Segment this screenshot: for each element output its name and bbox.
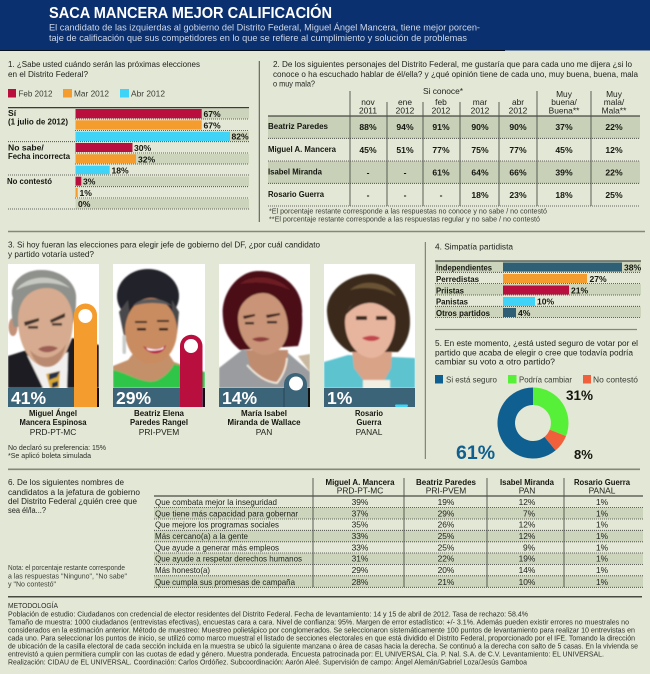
bar chart: election date knowledge: Fecha incorrecta [8, 151, 70, 161]
donut chart [456, 387, 593, 464]
bar chart: election date knowledge: 1% [80, 188, 92, 198]
table: candidate attributes: Que cumpla sus promesas de campaña [155, 577, 295, 587]
table: candidate attributes: 7% [523, 508, 536, 518]
table: name recognition and opinion: 25% [605, 190, 623, 200]
table: candidate attributes: 29% [352, 565, 369, 575]
table: candidate attributes: 1% [596, 531, 609, 541]
table: name recognition and opinion: mar [473, 97, 487, 107]
subtitle: taje de calificación que sus competidores en lo que se refiere al cumplimiento y solución de problemas [49, 33, 467, 43]
bar chart: party sympathy: Independientes [436, 262, 492, 272]
question 6 heading: candidatos a la jefatura de gobierno [8, 487, 140, 497]
bar chart: party sympathy: 38% [624, 262, 642, 272]
panel: methodology: entrevistó a quien permitiera cumplir con las cuotas de edad y género. Muestra ponderada. Encuesta patrocinada por: EL UNIVERSAL Cía. P. Nal. S.A. de C.V. Levantamiento: EL UNIVERSAL. [8, 650, 604, 658]
candidate names: Rosario [355, 408, 383, 418]
table: name recognition and opinion: 77% [509, 145, 527, 155]
note: undeclared preference [8, 443, 106, 460]
table: candidate attributes: PRD-PT-MC [337, 486, 383, 496]
table: candidate attributes: Que ayude a generar más empleos [155, 542, 279, 552]
table: candidate attributes: 1% [596, 565, 609, 575]
table: name recognition and opinion: - [404, 168, 407, 178]
table: candidate attributes: 39% [352, 497, 369, 507]
candidate names: Miranda de Wallace [228, 417, 301, 427]
panel: methodology [8, 601, 638, 666]
table: name recognition and opinion: 2012 [396, 106, 415, 116]
bar chart: election date knowledge: 30% [134, 143, 152, 153]
bar chart: party sympathy: Panistas [436, 296, 468, 306]
table: name recognition and opinion: 39% [555, 168, 573, 178]
question 6 heading: del Distrito Federal ¿quién cree que [8, 496, 137, 506]
donut chart: 31% [566, 388, 593, 403]
table: candidate attributes: 19% [519, 554, 536, 564]
bar chart: election date knowledge: Sí [8, 108, 17, 118]
table: candidate attributes: Más cercano(a) a la gente [155, 531, 248, 541]
table: name recognition and opinion: 77% [432, 145, 450, 155]
bar chart: party sympathy: Perredistas [436, 274, 479, 284]
table: candidate attributes: PAN [519, 486, 535, 496]
bar chart: election date knowledge: 0% [78, 199, 91, 209]
candidate card: Mancera [8, 264, 99, 408]
legend: vote certainty: Podría cambiar [519, 374, 572, 384]
question 6 heading [8, 477, 140, 515]
question 5 heading [435, 338, 638, 366]
candidate card: Miranda: 14% [222, 388, 257, 408]
bar chart: party sympathy: 4% [518, 308, 531, 318]
bar chart: election date knowledge: 32% [138, 154, 156, 164]
table: name recognition and opinion: 2012 [471, 106, 490, 116]
candidate card: Paredes [113, 264, 205, 408]
panel: methodology: Tamaño de muestra: 1000 ciudadanos (entrevistas efectivas), encuestas cara a cara. Nivel de confianza: 95%. Margen de error estadístico: +/- 3.1%. Además pueden existir errores no muestrales no [8, 618, 629, 626]
donut chart: 8% [574, 447, 593, 462]
table: name recognition and opinion: - [440, 190, 443, 200]
table: candidate attributes: PANAL [589, 486, 616, 496]
table: name recognition and opinion: 45% [359, 145, 377, 155]
candidate card: Guerra: 1% [327, 388, 353, 408]
question 3 heading: y partido votaría usted? [8, 249, 94, 259]
table: name recognition and opinion: 45% [555, 145, 573, 155]
legend: months: Mar 2012 [74, 88, 109, 98]
candidate card: Paredes: 29% [116, 388, 151, 408]
candidate names: PANAL [356, 427, 383, 437]
table: candidate attributes: 12% [519, 520, 536, 530]
footnotes [269, 208, 547, 224]
table: candidate attributes: 25% [438, 542, 455, 552]
table: name recognition and opinion: abr [512, 97, 524, 107]
table: candidate attributes: 21% [438, 577, 455, 587]
table: candidate attributes: 12% [519, 497, 536, 507]
bar chart: election date knowledge [7, 108, 249, 209]
table: name recognition and opinion: 2012 [509, 106, 528, 116]
bar chart: party sympathy [435, 261, 642, 318]
table: name recognition and opinion: Buena** [549, 106, 580, 116]
footnotes: **El porcentaje restante corresponde a las respuestas regular y no sabe / no contestó [269, 216, 540, 224]
panel: methodology: considerados en la estimación anterior. Método de muestreo: Muestreo polietápico por conglomerados. Se seleccionaron sistemáticamente 100 puntos de levantamiento para realizar 10 entrevistas en [8, 626, 635, 634]
table: candidate attributes: 20% [438, 565, 455, 575]
gauge: red [180, 335, 202, 407]
table: name recognition and opinion: 22% [605, 122, 623, 132]
table: candidate attributes: 14% [519, 565, 536, 575]
table: name recognition and opinion: 64% [471, 168, 489, 178]
panel: methodology: Población de estudio: Ciudadanos con credencial de elector residentes del Distrito Federal. Fecha de levantamiento: 14 y 15 de abril de 2012. Tasa de rechazo: 58.4% [8, 610, 528, 618]
table: name recognition and opinion: mala/ [604, 97, 625, 107]
table: candidate attributes: 25% [438, 531, 455, 541]
table: name recognition and opinion: 18% [471, 190, 489, 200]
percent band [324, 388, 415, 407]
table: candidate attributes: 31% [352, 554, 369, 564]
table: candidate attributes: Que tiene más capacidad para gobernar [155, 508, 298, 518]
table: candidate attributes: 33% [352, 542, 369, 552]
table: candidate attributes: 28% [352, 577, 369, 587]
bar chart: election date knowledge: No contestó [7, 176, 52, 186]
percent band [219, 388, 310, 407]
candidate names: PRD-PT-MC [30, 427, 76, 437]
legend: vote certainty: Si está seguro [446, 374, 497, 384]
table: candidate attributes: 22% [438, 554, 455, 564]
question 3 heading [8, 240, 320, 259]
table: name recognition and opinion: Miguel A. Mancera [268, 144, 336, 154]
question 4 heading: 4. Simpatía partidista [435, 242, 513, 252]
table: candidate attributes: PRI-PVEM [426, 486, 466, 496]
header banner [0, 0, 650, 51]
bar chart: election date knowledge: No sabe/ [8, 142, 44, 152]
panel: methodology: Realización: CIDAU de EL UNIVERSAL. Coordinación: Carlos Ordóñez. Subcoordinación: Aarón Aleé. Supervisión de campo: Ángel Alemán/Gabriel Loza/Jesús Gamboa [8, 658, 528, 666]
bar chart: party sympathy: Otros partidos [436, 308, 490, 318]
table: candidate attributes: 35% [352, 520, 369, 530]
table: name recognition and opinion: 91% [432, 122, 450, 132]
table: name recognition and opinion: Si conoce* [423, 86, 464, 96]
bar chart: election date knowledge: 18% [112, 166, 129, 176]
table: name recognition and opinion: feb [435, 97, 447, 107]
candidate names: Miguel Ángel [29, 408, 77, 418]
panel: question 1 [7, 59, 249, 209]
panel: question 6 [8, 477, 643, 588]
table: candidate attributes: 12% [519, 531, 536, 541]
table: name recognition and opinion: Beatriz Paredes [268, 121, 328, 131]
panel: question 4 [435, 242, 642, 318]
legend: vote certainty: No contestó [593, 374, 638, 384]
bar chart: party sympathy: 10% [537, 296, 555, 306]
note: undeclared preference: No declaró su preferencia: 15% [8, 443, 106, 452]
table: candidate attributes: Que ayude a respetar derechos humanos [155, 554, 302, 564]
legend: months: Feb 2012 [18, 88, 53, 98]
candidate names: Guerra [356, 417, 382, 427]
table: candidate attributes: 1% [596, 508, 609, 518]
table: name recognition and opinion: nov [361, 97, 376, 107]
candidate card: Miranda [219, 264, 310, 408]
note: remaining percentage: a las respuestas "Ninguno", "No sabe" [8, 574, 128, 580]
question 3 heading: 3. Si hoy fueran las elecciones para elegir jefe de gobierno del DF, ¿por cuál candidato [8, 240, 320, 250]
table: name recognition and opinion: 12% [605, 145, 623, 155]
question 6 heading: 6. De los siguientes nombres de [8, 477, 124, 487]
table: candidate attributes: 1% [596, 542, 609, 552]
table: candidate attributes: 29% [438, 508, 455, 518]
table: candidate attributes: 19% [438, 497, 455, 507]
footnotes: *El porcentaje restante corresponde a las respuestas no conoce y no sabe / no contestó [269, 208, 547, 216]
table: candidate attributes: 9% [523, 542, 536, 552]
panel: question 5 [435, 338, 638, 464]
note: undeclared preference: *Se aplicó boleta simulada [8, 451, 92, 460]
table: name recognition and opinion: 88% [359, 122, 377, 132]
question 1 heading [8, 59, 200, 79]
question 2 heading: 2. De los siguientes personajes del Distrito Federal, me gustaría que para cada uno me dijera ¿si lo [273, 59, 632, 69]
question 6 heading: sea él/la...? [8, 505, 46, 515]
table: name recognition and opinion: 18% [555, 190, 573, 200]
bar chart: party sympathy: 27% [590, 274, 607, 284]
note: remaining percentage: y "No contestó" [8, 582, 57, 588]
table: candidate attributes: 33% [352, 531, 369, 541]
question 5 heading: cambiar su voto a otro partido? [435, 356, 555, 366]
table: name recognition and opinion: Muy [606, 89, 623, 99]
legend: months [8, 88, 165, 98]
bar chart: party sympathy: 21% [571, 286, 589, 296]
subtitle [49, 22, 480, 43]
table: name recognition and opinion: 90% [471, 122, 489, 132]
table: name recognition and opinion: 90% [509, 122, 527, 132]
table: candidate attributes: Que mejore los programas sociales [155, 520, 279, 530]
donut chart: 61% [456, 442, 495, 464]
table: name recognition and opinion: 66% [509, 168, 527, 178]
question 5 heading: partido que acaba de elegir o cree que todavía podría [435, 348, 633, 358]
table: name recognition and opinion [268, 86, 640, 206]
legend: vote certainty [435, 374, 638, 384]
table: name recognition and opinion: 2011 [359, 106, 377, 116]
table: candidate attributes: 37% [352, 508, 369, 518]
table: candidate attributes: 1% [596, 520, 609, 530]
note: remaining percentage: Nota: el porcentaje restante corresponde [8, 565, 125, 572]
candidate names: Paredes Rangel [130, 417, 188, 427]
candidate card: Mancera: 41% [11, 388, 46, 408]
table: candidate attributes [154, 477, 643, 587]
table: name recognition and opinion: 23% [509, 190, 527, 200]
question 2 heading [273, 59, 638, 88]
table: name recognition and opinion: 2012 [432, 106, 451, 116]
table: name recognition and opinion: 61% [432, 168, 450, 178]
legend: months: Abr 2012 [131, 88, 165, 98]
gauge: orange [74, 304, 97, 407]
table: candidate attributes: Que combata mejor la inseguridad [155, 497, 277, 507]
question 2 heading: conoce o ha escuchado hablar de él/ella? y ¿qué opinión tiene de cada uno, muy buena, buena, mala [273, 69, 638, 79]
question 2 heading: o muy mala? [273, 78, 315, 88]
table: name recognition and opinion: Rosario Guerra [268, 189, 324, 199]
table: name recognition and opinion: - [367, 168, 370, 178]
question 1 heading: en el Distrito Federal? [8, 69, 88, 79]
table: name recognition and opinion: - [404, 190, 407, 200]
bar chart: election date knowledge: 3% [83, 176, 96, 186]
subtitle: El candidato de las izquierdas al gobierno del Distrito Federal, Miguel Ángel Mancera, tiene mejor porcen- [49, 22, 480, 32]
bar chart: election date knowledge: 67% [204, 120, 221, 130]
candidate names [20, 408, 383, 437]
table: candidate attributes: Isabel Miranda [500, 477, 554, 487]
photo: Beatriz Paredes [113, 269, 205, 388]
table: candidate attributes: Beatriz Paredes [416, 477, 476, 487]
candidate names: Beatriz Elena [134, 408, 184, 418]
candidate card: Guerra [324, 264, 415, 408]
table: name recognition and opinion: 51% [396, 145, 414, 155]
percent band [8, 388, 99, 407]
table: candidate attributes: Rosario Guerra [574, 477, 630, 487]
table: candidate attributes: 10% [519, 577, 536, 587]
table: candidate attributes: 26% [438, 520, 455, 530]
bar chart: election date knowledge: 67% [204, 109, 221, 119]
table: candidate attributes: 1% [596, 497, 609, 507]
table: name recognition and opinion: Mala** [602, 106, 627, 116]
panel: question 2 [268, 59, 640, 224]
panel: methodology: cada uno. Para seleccionar los puntos de inicio, se utilizó como marco muestral el listado de secciones electorales en que está dividido el Distrito Federal, proporcionado por el IFE. Tomando la dirección [8, 634, 635, 642]
table: candidate attributes: 1% [596, 577, 609, 587]
table: name recognition and opinion: buena/ [551, 97, 577, 107]
table: name recognition and opinion: Muy [556, 89, 573, 99]
table: name recognition and opinion: 75% [471, 145, 489, 155]
photo: Rosario Guerra [324, 274, 415, 388]
candidate names: Mancera Espinosa [20, 417, 87, 427]
bar chart: election date knowledge: (1 julio de 2012) [8, 116, 68, 126]
candidate names: PAN [256, 427, 272, 437]
photo: Miguel Ángel Mancera [8, 270, 99, 388]
photo: Isabel Miranda [219, 271, 310, 388]
table: name recognition and opinion: - [367, 190, 370, 200]
bar chart: election date knowledge: 82% [232, 132, 249, 142]
note: remaining percentage [8, 565, 128, 588]
table: candidate attributes: 1% [596, 554, 609, 564]
question 5 heading: 5. En este momento, ¿está usted seguro de votar por el [435, 338, 638, 348]
panel: methodology: METODOLOGÍA [8, 601, 58, 610]
table: candidate attributes: Miguel A. Mancera [326, 477, 395, 487]
table: name recognition and opinion: 22% [605, 168, 623, 178]
gauge: teal [284, 373, 307, 407]
candidate names: María Isabel [241, 408, 287, 418]
bar chart: party sympathy: Priistas [436, 286, 464, 296]
table: name recognition and opinion: 37% [555, 122, 573, 132]
question 1 heading: 1. ¿Sabe usted cuándo serán las próximas elecciones [8, 59, 200, 69]
percent band [113, 388, 205, 407]
table: candidate attributes: Más honesto(a) [155, 565, 210, 575]
panel: question 3 [8, 240, 415, 460]
table: name recognition and opinion: 94% [396, 122, 414, 132]
candidate names: PRI-PVEM [139, 427, 179, 437]
table: name recognition and opinion: Isabel Miranda [268, 166, 322, 176]
title: SACA MANCERA MEJOR CALIFICACIÓN [49, 3, 332, 22]
table: name recognition and opinion: ene [398, 97, 412, 107]
